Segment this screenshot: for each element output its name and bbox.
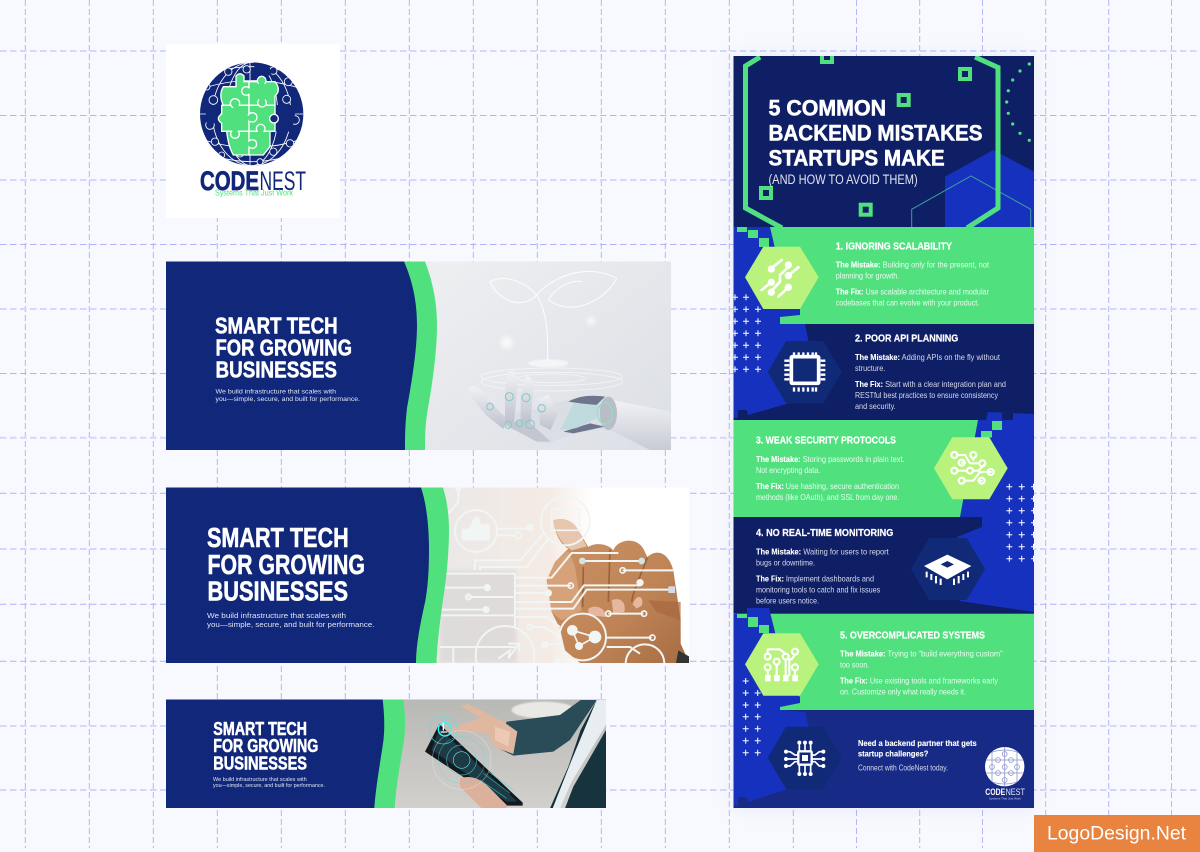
body text: on. Customize only what really needs it. xyxy=(840,686,966,696)
banner headline: FOR GROWING xyxy=(208,549,365,580)
title: BACKEND MISTAKES xyxy=(768,121,982,146)
call to action text: Need a backend partner that gets xyxy=(858,738,977,748)
body text: RESTful best practices to ensure consistency xyxy=(855,390,999,400)
body text: too soon. xyxy=(840,659,869,669)
icon: puzzle globe xyxy=(200,60,303,167)
logo: white CodeNest: Systems That Just Work xyxy=(989,796,1021,800)
heading: 1. IGNORING SCALABILITY xyxy=(836,240,952,252)
section 5: overcomplicated systems xyxy=(745,629,1003,696)
title: 5 COMMON xyxy=(768,96,886,121)
logo: CodeNest xyxy=(166,44,340,218)
body text: methods (like OAuth), and SSL from day one. xyxy=(756,492,899,502)
photo: robot hand and sprout xyxy=(425,262,671,450)
banner headline xyxy=(215,317,352,378)
photo: hand on tablet xyxy=(393,699,607,809)
banner 2: circuit hand xyxy=(166,488,689,663)
banner 3: tablet xyxy=(166,699,607,809)
body text: The Mistake: Adding APIs on the fly without xyxy=(855,352,1001,362)
panel: header xyxy=(734,52,1034,228)
banner headline: BUSINESSES xyxy=(216,357,337,383)
banner 1: robot hand xyxy=(166,262,671,450)
banner headline: SMART TECH xyxy=(207,522,349,553)
heading: 2. POOR API PLANNING xyxy=(855,333,958,345)
wordmark: CODE xyxy=(200,166,259,196)
title: STARTUPS MAKE xyxy=(768,146,945,171)
subtitle: (AND HOW TO AVOID THEM) xyxy=(768,172,918,187)
banner headline: BUSINESSES xyxy=(213,753,307,773)
banner headline xyxy=(207,528,364,601)
section 4: no real-time monitoring xyxy=(756,527,985,605)
watermark badge: LogoDesign.Net xyxy=(1047,824,1187,844)
body text: The Mistake: Building only for the present, not xyxy=(836,259,990,269)
call to action text line 2: startup challenges? xyxy=(858,749,928,759)
banner headline: SMART TECH xyxy=(215,312,338,338)
icon: circuit nodes on hexagon xyxy=(934,437,1008,499)
body text xyxy=(840,648,1003,696)
section 3: weak security protocols xyxy=(756,435,1008,502)
body text: Not encrypting data. xyxy=(756,465,820,475)
green wave xyxy=(416,488,449,663)
section 2: poor API planning xyxy=(768,333,1006,411)
body text xyxy=(836,259,990,307)
body text: bugs or downtime. xyxy=(756,557,815,567)
body text: structure. xyxy=(855,363,885,373)
banner subtext: We build infrastructure that scales with xyxy=(216,388,336,395)
body text xyxy=(855,352,1006,411)
section 1: ignoring scalability xyxy=(745,240,990,309)
body text: The Fix: Use scalable architecture and modular xyxy=(836,286,989,296)
banner headline: FOR GROWING xyxy=(216,335,352,361)
body text xyxy=(756,454,905,502)
icon: isometric chip on hexagon xyxy=(911,538,985,600)
heading: 3. WEAK SECURITY PROTOCOLS xyxy=(756,435,896,447)
body text: monitoring tools to catch and fix issues xyxy=(756,584,880,594)
panel: infographic xyxy=(732,52,1035,808)
wordmark light: NEST xyxy=(260,166,306,196)
photo: hand touching circuit xyxy=(436,488,689,663)
watermark badge xyxy=(1034,815,1200,852)
icon: processor on hexagon xyxy=(768,727,842,789)
banner subtext: you—simple, secure, and built for performance. xyxy=(216,396,360,403)
banner headline: FOR GROWING xyxy=(213,736,318,756)
banner headline: SMART TECH xyxy=(213,719,307,739)
icon: circuit pins on hexagon xyxy=(745,633,819,696)
body text: The Mistake: Trying to “build everything custom” xyxy=(840,648,1003,658)
banner subtext: you—simple, secure, and built for performance. xyxy=(213,783,325,789)
body text: The Fix: Implement dashboards and xyxy=(756,573,874,583)
banner subtext xyxy=(213,777,325,789)
body text: The Mistake: Waiting for users to report xyxy=(756,546,889,556)
heading: 4. NO REAL-TIME MONITORING xyxy=(756,527,893,539)
banner headline: BUSINESSES xyxy=(208,576,348,607)
banner headline xyxy=(213,722,318,770)
banner subtext: you—simple, secure, and built for performance. xyxy=(207,620,374,629)
tagline: Systems That Just Work xyxy=(215,188,294,198)
banner subtext xyxy=(216,388,360,403)
title xyxy=(768,100,982,166)
icon: CPU chip on hexagon xyxy=(768,341,842,403)
body text: The Fix: Use existing tools and frameworks early xyxy=(840,675,999,685)
icon: circuit lines on hexagon xyxy=(745,247,819,309)
connect line: Connect with CodeNest today. xyxy=(858,763,948,773)
green wave xyxy=(404,262,437,450)
body text: codebases that can evolve with your product. xyxy=(836,297,979,307)
body text xyxy=(756,546,889,605)
body text: and security. xyxy=(855,401,896,411)
banner subtext: We build infrastructure that scales with xyxy=(213,777,307,783)
heading: 5. OVERCOMPLICATED SYSTEMS xyxy=(840,629,985,641)
body text: before users notice. xyxy=(756,595,819,605)
logo: white CodeNest: CODE xyxy=(985,787,1005,797)
body text: The Fix: Start with a clear integration plan and xyxy=(855,379,1006,389)
body text: planning for growth. xyxy=(836,270,899,280)
green wave xyxy=(374,700,405,808)
body text: The Fix: Use hashing, secure authentication xyxy=(756,481,899,491)
logo: white CodeNest xyxy=(985,747,1025,800)
body text: The Mistake: Storing passwords in plain text. xyxy=(756,454,905,464)
banner subtext xyxy=(207,612,374,628)
logo: white CodeNest: NEST xyxy=(1006,787,1025,797)
footer call to action xyxy=(768,727,1025,800)
banner subtext: We build infrastructure that scales with xyxy=(207,611,346,620)
